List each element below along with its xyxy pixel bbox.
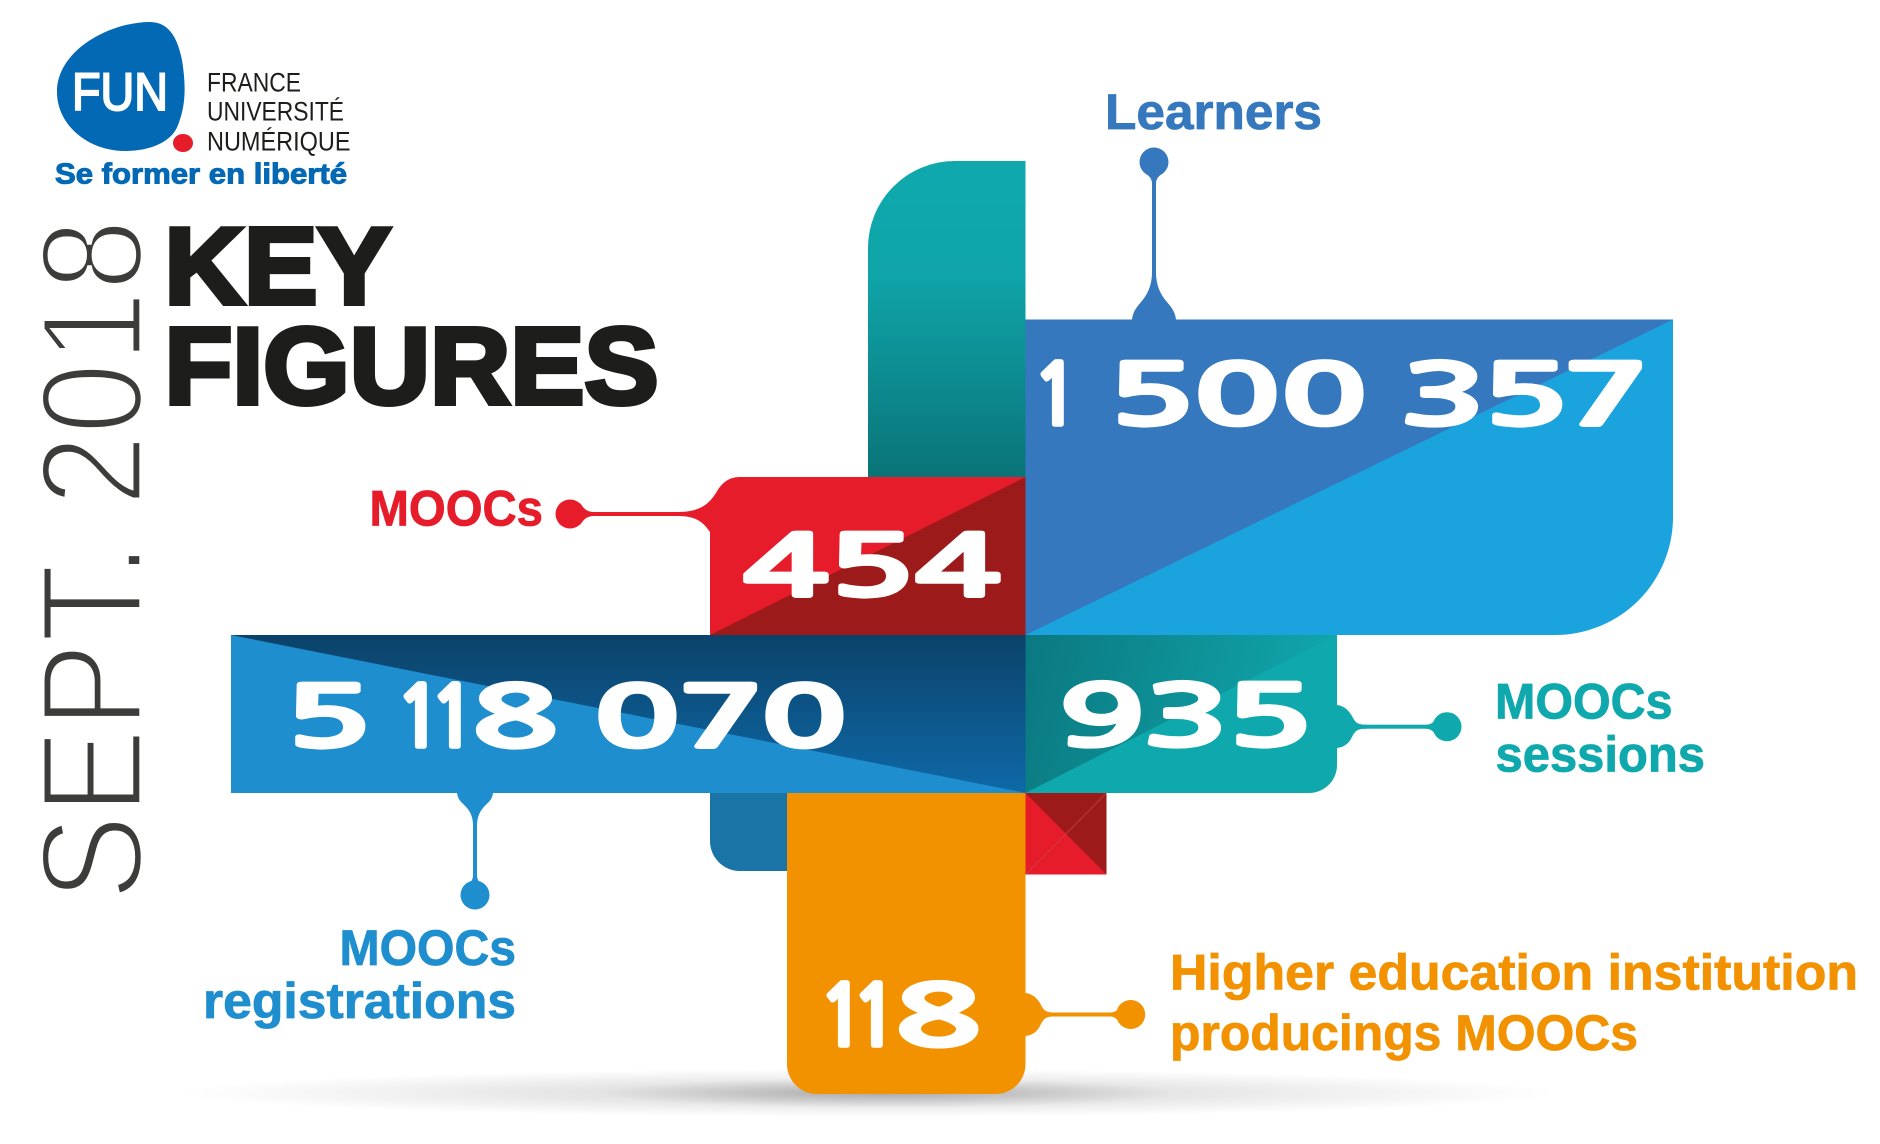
number: 935: 5 bbox=[1225, 675, 1313, 759]
number: 118: 8 bbox=[894, 975, 982, 1059]
label: MOOCs registrations bbox=[203, 920, 516, 1029]
logo name: UNIVERSITÉ bbox=[207, 97, 344, 127]
number: 454: 4 bbox=[914, 524, 1002, 608]
title: FIGURES bbox=[164, 306, 658, 428]
logo red dot bbox=[173, 134, 193, 152]
label: MOOCs sessions bbox=[1495, 673, 1705, 783]
teal vertical tab bbox=[868, 161, 1026, 477]
number: 5 118 070: 1 bbox=[429, 676, 477, 760]
label: MOOCs registrations: registrations bbox=[203, 973, 516, 1029]
label: higher education institutions: Higher education institution bbox=[1170, 944, 1858, 1000]
ground shadow bbox=[178, 1069, 1558, 1117]
number: 935 bbox=[1058, 675, 1313, 759]
number: 5 118 070: 8 bbox=[471, 676, 559, 760]
number: 454 bbox=[742, 524, 1002, 608]
number: 5 118 070: 0 bbox=[760, 676, 848, 760]
number: 1 500 357: 0 bbox=[1193, 354, 1281, 438]
number: 454: 5 bbox=[827, 524, 915, 608]
label: MOOCs registrations: MOOCs bbox=[340, 920, 516, 976]
panel: learners bbox=[1026, 320, 1673, 635]
number: 118: 1 bbox=[818, 975, 866, 1059]
connector: MOOCs registrations bbox=[457, 793, 493, 910]
number: 1 500 357 bbox=[1032, 354, 1650, 438]
number: 1 500 357: 5 bbox=[1107, 354, 1195, 438]
number: 1 500 357: 5 bbox=[1481, 354, 1569, 438]
connector: learners bbox=[1132, 148, 1176, 320]
label: learners: Learners bbox=[1105, 84, 1322, 140]
number: 1 500 357: 7 bbox=[1562, 354, 1650, 438]
panel: MOOCs registrations bbox=[231, 635, 1026, 793]
number: 5 118 070: 1 bbox=[395, 676, 443, 760]
logo tagline: Se former en liberté bbox=[55, 158, 347, 190]
label: higher education institutions bbox=[1170, 944, 1858, 1061]
logo name: NUMÉRIQUE bbox=[207, 127, 350, 157]
small red square bbox=[1026, 793, 1106, 874]
number: 935: 3 bbox=[1142, 675, 1230, 759]
number: 1 500 357: 3 bbox=[1399, 354, 1487, 438]
logo name: FRANCE bbox=[207, 68, 301, 98]
panel: orange institutions bbox=[787, 793, 1026, 1094]
connector: MOOCs sessions bbox=[1337, 705, 1462, 748]
logo name bbox=[207, 68, 350, 157]
number: 5 118 070 bbox=[284, 676, 848, 760]
number: 1 500 357: 0 bbox=[1280, 354, 1368, 438]
logo blob bbox=[57, 22, 185, 151]
label: MOOCs: MOOCs bbox=[370, 481, 543, 537]
logo: France Université Numérique bbox=[55, 22, 350, 190]
panel: MOOCs bbox=[678, 477, 1026, 635]
dark blue tab below bar bbox=[710, 793, 800, 871]
panel: MOOCs sessions bbox=[1026, 635, 1337, 793]
title: KEY bbox=[164, 206, 391, 328]
number: 5 118 070: 0 bbox=[593, 676, 681, 760]
number: 5 118 070: 5 bbox=[284, 676, 372, 760]
title bbox=[164, 206, 658, 428]
number: 935: 9 bbox=[1058, 675, 1146, 759]
logo letters FUN: FUN bbox=[72, 63, 168, 122]
connector: institutions bbox=[1026, 993, 1145, 1036]
number: 1 500 357: 1 bbox=[1032, 354, 1080, 438]
number: 454: 4 bbox=[742, 524, 830, 608]
label: higher education institutions: producings MOOCs bbox=[1170, 1005, 1638, 1061]
label: MOOCs sessions: MOOCs bbox=[1495, 673, 1672, 729]
label: MOOCs sessions: sessions bbox=[1496, 727, 1705, 783]
number: 5 118 070: 7 bbox=[677, 676, 765, 760]
connector: MOOCs bbox=[556, 500, 680, 528]
vertical date: SEPT. 2018 bbox=[11, 219, 173, 901]
number: 118: 1 bbox=[851, 975, 899, 1059]
number: 118 bbox=[818, 975, 982, 1059]
